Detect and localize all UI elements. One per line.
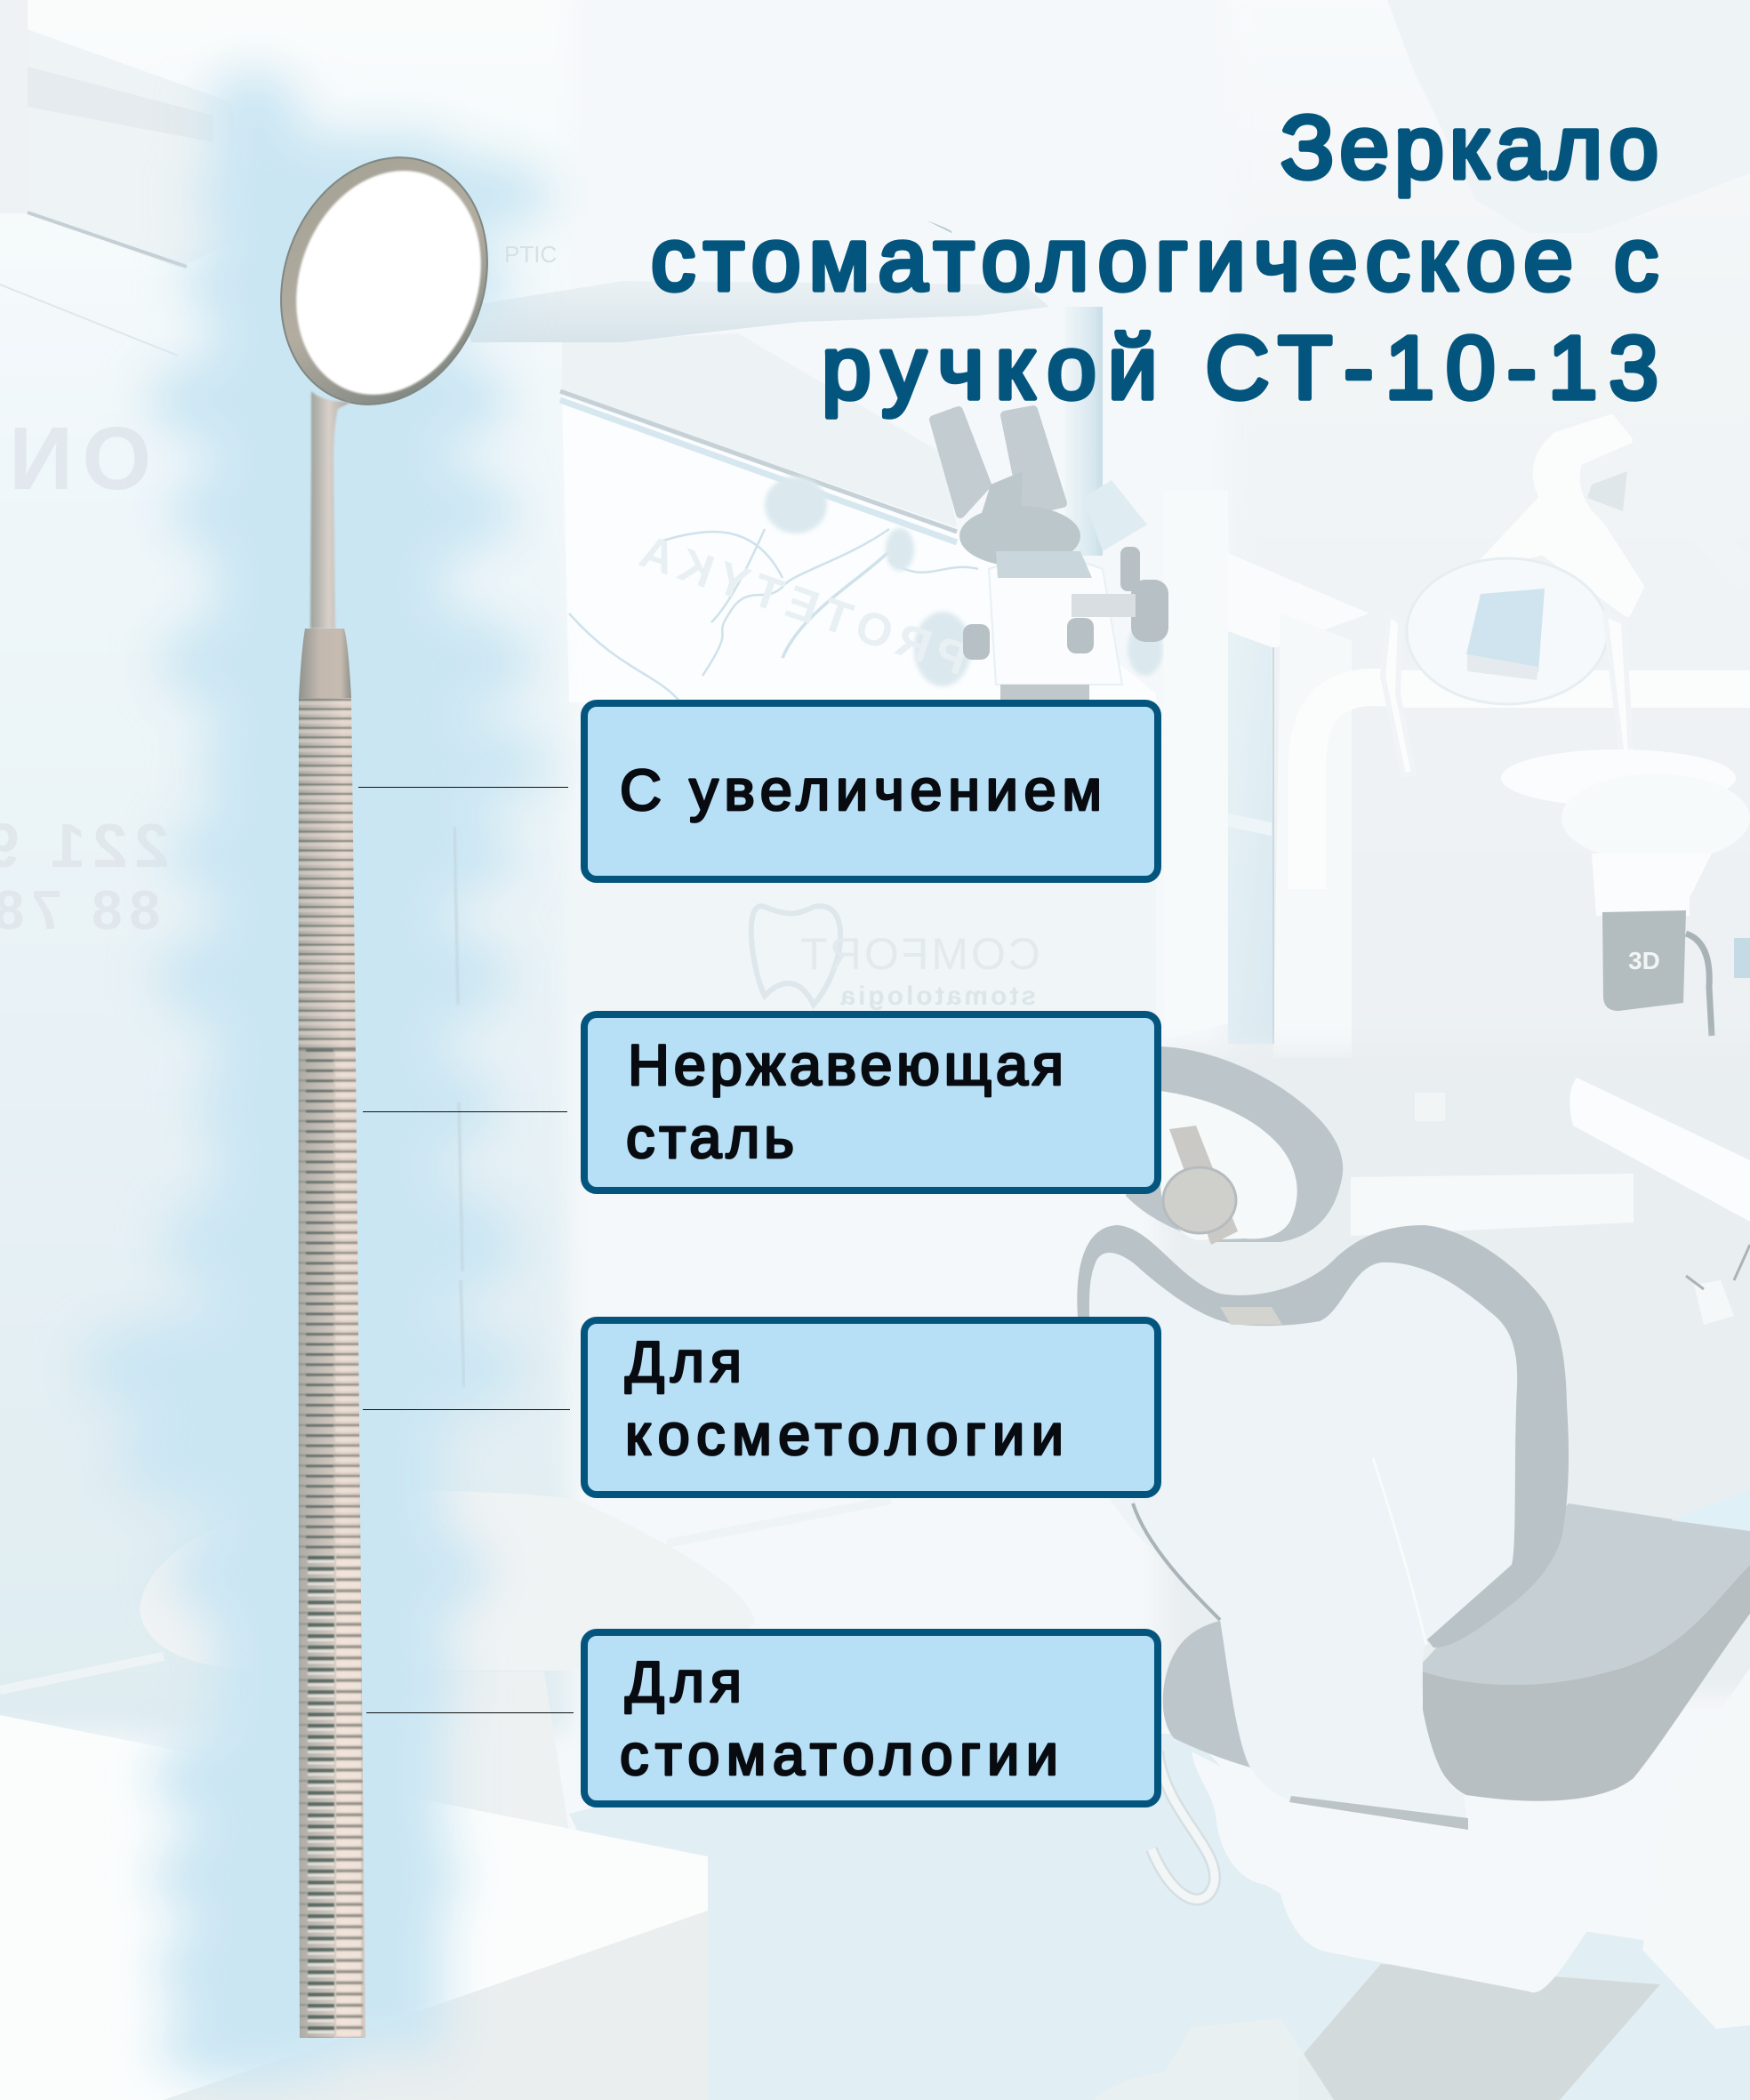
floor bbox=[569, 1734, 1750, 2100]
3D pad and cable: 3D bbox=[1628, 947, 1660, 974]
panel: нержавеющая сталь: сталь bbox=[626, 1105, 794, 1170]
panel: для косметологии bbox=[584, 1320, 1158, 1495]
stool bbox=[0, 1490, 891, 1831]
rear counter and bracket bbox=[1160, 1049, 1750, 1689]
white cabinet foreground bbox=[0, 1715, 708, 2100]
wall below window bbox=[569, 880, 1156, 1014]
panel: для стоматологии: Для bbox=[625, 1649, 742, 1714]
ceiling corner right bbox=[1387, 0, 1750, 233]
connector line 2 bbox=[363, 1111, 567, 1113]
panel: для косметологии: Для bbox=[625, 1329, 742, 1394]
mirror head bbox=[247, 128, 521, 434]
panel: для косметологии: косметологии bbox=[625, 1402, 1064, 1467]
connector line 3 bbox=[363, 1408, 570, 1410]
faint vertical window edge bbox=[454, 827, 464, 1387]
3D pad and cable bbox=[1602, 910, 1750, 1036]
dental mirror instrument bbox=[247, 128, 521, 2040]
mirror neck bbox=[310, 391, 351, 629]
dental lamp bbox=[1307, 418, 1750, 916]
panel: нержавеющая сталь: Нержавеющая bbox=[628, 1032, 1064, 1097]
headrest bbox=[1126, 1046, 1343, 1245]
microscope bbox=[934, 410, 1168, 702]
wall logo bbox=[751, 906, 1040, 1011]
chair backrest bbox=[1077, 1225, 1569, 1830]
mirrored wall lettering bbox=[0, 409, 169, 942]
faint lettering on glow: PTIC bbox=[504, 241, 557, 268]
door frame and window pane bbox=[1163, 491, 1369, 1058]
connector line 4 bbox=[366, 1712, 574, 1714]
panel: с увеличением: С увеличением bbox=[620, 757, 1102, 822]
knurled handle bbox=[299, 698, 365, 2038]
title: стоматологическое с bbox=[651, 210, 1658, 309]
chair base bbox=[1152, 1668, 1750, 2100]
blue glow behind instrument bbox=[80, 71, 556, 2085]
connector line 1 bbox=[358, 786, 568, 788]
wall logo: COMFORT bbox=[798, 929, 1040, 979]
title bbox=[651, 98, 1658, 418]
upper arm and ceiling wedge bbox=[462, 220, 1103, 556]
panel: нержавеющая сталь bbox=[584, 1014, 1158, 1190]
window with tree bbox=[560, 391, 1163, 756]
panel: с увеличением bbox=[584, 703, 1158, 879]
chair seat bbox=[1163, 1489, 1750, 1801]
left window frame bbox=[0, 0, 258, 356]
panel: для стоматологии bbox=[584, 1632, 1158, 1804]
panel: для стоматологии: стоматологии bbox=[620, 1722, 1058, 1787]
window with tree: PROTETYKA bbox=[627, 524, 974, 685]
stool corner bbox=[1094, 2018, 1334, 2100]
handle collar bbox=[299, 629, 351, 698]
title: ручкой СТ-10-13 bbox=[822, 318, 1658, 418]
title: Зеркало bbox=[1280, 98, 1658, 197]
wall logo: stomatologia bbox=[838, 982, 1036, 1011]
